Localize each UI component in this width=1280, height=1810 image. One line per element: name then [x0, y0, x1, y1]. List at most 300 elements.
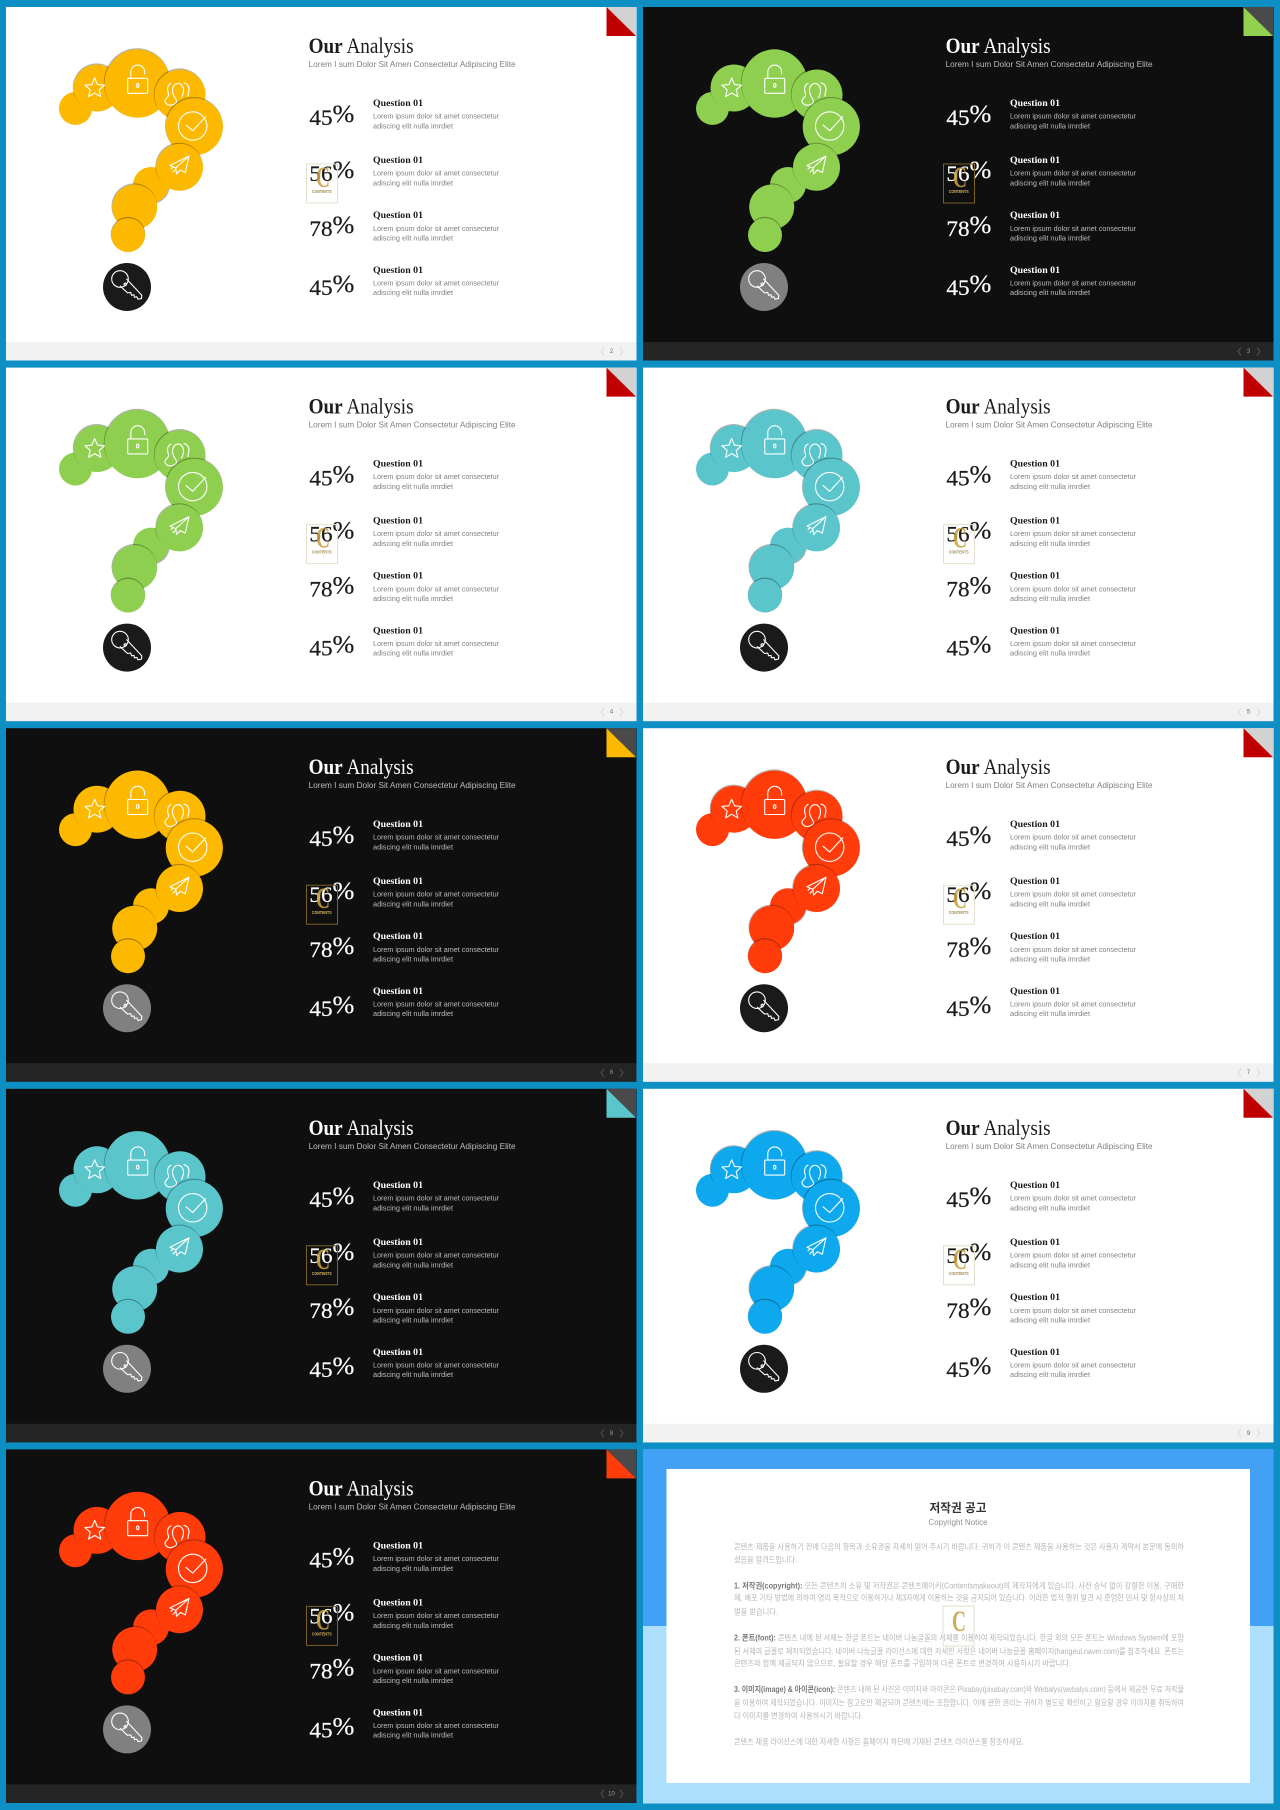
- stat 1: Lorem ipsum dolor sit amet consectetur: [373, 835, 500, 842]
- stat 4: [309, 627, 500, 661]
- copyright body text: [734, 1542, 1185, 1746]
- stat 4: 45: [309, 1717, 331, 1742]
- icons: [722, 65, 844, 174]
- stat 1: [309, 1541, 500, 1573]
- stat 3: Question 01: [1010, 572, 1060, 582]
- stat 1: adiscing elit nulla imrdiet: [373, 124, 453, 130]
- stat 3: 78: [946, 577, 968, 602]
- watermark: C: [953, 522, 967, 555]
- watermark: CONTENTS: [949, 550, 969, 555]
- stat 4: Question 01: [1010, 987, 1060, 997]
- stat 1: Question 01: [1010, 99, 1060, 109]
- stat 1: Question 01: [1010, 820, 1060, 830]
- page number: [601, 1429, 623, 1437]
- stat 3: [946, 932, 1137, 964]
- stat 2: [946, 517, 1137, 548]
- stat 3: Lorem ipsum dolor sit amet consectetur: [373, 1668, 500, 1675]
- stat 3: Question 01: [373, 572, 423, 582]
- page number: 4: [610, 710, 614, 716]
- stat 3: [309, 932, 500, 964]
- stat 1: 45: [309, 1547, 331, 1572]
- stat 3: Question 01: [373, 1293, 423, 1303]
- icons: [85, 65, 207, 174]
- subtitle: Lorem I sum Dolor Sit Amen Consectetur Adipiscing Elite: [309, 1502, 516, 1511]
- page number: 8: [610, 1431, 614, 1437]
- stat 2: 56: [309, 161, 331, 186]
- question mark of circles: [59, 409, 223, 613]
- stat 1: %: [970, 822, 991, 849]
- corner fold: [606, 728, 636, 757]
- stat 1: Lorem ipsum dolor sit amet consectetur: [373, 1195, 500, 1202]
- title: Our Analysis: [309, 394, 414, 419]
- stat 1: 45: [309, 1187, 331, 1212]
- stat 3: 78: [309, 577, 331, 602]
- page number: [1238, 1069, 1260, 1077]
- icons: [722, 426, 844, 535]
- stat 2: 56: [946, 522, 968, 547]
- watermark: [306, 882, 338, 924]
- stat 4: 45: [309, 996, 331, 1021]
- stat 1: adiscing elit nulla imrdiet: [373, 845, 453, 852]
- stat 4: [309, 1348, 500, 1382]
- page number: [1238, 1429, 1260, 1437]
- page number: [1238, 708, 1260, 716]
- stat 3: %: [333, 933, 354, 960]
- key circle: [103, 263, 151, 311]
- stat 2: [309, 877, 500, 909]
- copyright body text: 콘텐츠 제품을 사용하기 전에 다음의 항목과 소유권을 자세히 읽어 주시기 바랍니다. 귀하가 이 콘텐츠 제품을 사용하는 것은 사용자 계약서 본문에 동의하: [734, 1542, 1185, 1552]
- title: Our Analysis: [309, 33, 414, 58]
- stat 3: 78: [309, 1658, 331, 1683]
- stat 3: 78: [309, 1298, 331, 1323]
- stat 2: Lorem ipsum dolor sit amet consectetur: [373, 1252, 500, 1259]
- stat 2: %: [333, 1239, 354, 1266]
- stat 4: [309, 987, 500, 1021]
- stat 3: %: [333, 1294, 354, 1321]
- stat 3: Lorem ipsum dolor sit amet consectetur: [1010, 947, 1137, 954]
- stat 2: %: [970, 518, 991, 545]
- page number: [601, 1069, 623, 1077]
- stat 1: %: [970, 101, 991, 128]
- stat 4: Question 01: [373, 1708, 423, 1718]
- stat 3: adiscing elit nulla imrdiet: [373, 957, 453, 964]
- stat 4: Question 01: [1010, 266, 1060, 276]
- stat 2: adiscing elit nulla imrdiet: [1010, 1262, 1090, 1269]
- watermark: CONTENTS: [949, 1271, 969, 1276]
- stat 2: %: [970, 157, 991, 184]
- slide 7: red-orange question mark, light: [643, 728, 1274, 1082]
- stat 2: Question 01: [373, 1238, 423, 1248]
- stat 2: 56: [309, 522, 331, 547]
- watermark: [306, 1603, 338, 1645]
- stat 2: %: [333, 157, 354, 184]
- question mark of circles: [696, 48, 860, 252]
- stat 4: adiscing elit nulla imrdiet: [373, 651, 453, 658]
- slide 8: teal question mark, dark: [6, 1089, 636, 1442]
- slide 3: green question mark, dark: [643, 7, 1274, 360]
- title: Our Analysis: [946, 394, 1051, 419]
- copyright body text: 된 서체의 글꼴로 제작되었습니다. 네이버 나눔글꼴 라이선스에 대한 자세한 사항은 네이버 나눔글꼴 홈페이지(hangeul.naver.com)를 참조하세요. 폰트는: [734, 1646, 1184, 1656]
- corner fold: [1244, 1089, 1273, 1118]
- stat 4: 45: [309, 275, 331, 300]
- stat 4: [946, 627, 1137, 661]
- stat 4: Question 01: [1010, 1348, 1060, 1358]
- stat 4: Lorem ipsum dolor sit amet consectetur: [373, 280, 500, 288]
- stat 4: 45: [946, 636, 968, 661]
- page number: [601, 1790, 623, 1798]
- stat 1: adiscing elit nulla imrdiet: [1010, 845, 1090, 852]
- stat 3: %: [970, 212, 991, 239]
- subtitle: Lorem I sum Dolor Sit Amen Consectetur Adipiscing Elite: [309, 60, 516, 69]
- stat 2: 56: [309, 1243, 331, 1268]
- key circle: [740, 263, 788, 311]
- stat 3: %: [970, 573, 991, 600]
- copyright body text: 제, 배포 기타 방법에 의하여 영리 목적으로 이용하거나 제3자에게 이용하는 것을 금지되어 있습니다. 이러한 법적 행위 발견 시 준엄한 민사 및 형사상의 처: [734, 1592, 1184, 1602]
- corner fold: [606, 1449, 636, 1478]
- stat 1: %: [970, 462, 991, 489]
- stat 1: [946, 460, 1137, 491]
- stat 4: [946, 1348, 1137, 1382]
- stat 1: %: [333, 1183, 354, 1210]
- watermark: C: [952, 1605, 966, 1638]
- slide 10: red-orange question mark, dark: [6, 1449, 636, 1803]
- stat 2: Question 01: [373, 1598, 423, 1608]
- slide 9: blue question mark, light: [643, 1089, 1274, 1442]
- page number: [601, 708, 623, 716]
- copyright body text: 2. 폰트(font): 콘텐츠 내에 된 서체는 한글 폰트는 네이버 나눔글꼴의 서체를 이용하여 제작되었습니다. 한글 외의 모든 폰트는 Windows System에 포함: [734, 1632, 1185, 1642]
- stat 4: %: [970, 1353, 991, 1380]
- watermark: C: [316, 161, 330, 194]
- page number: [601, 348, 623, 356]
- stat 3: %: [970, 1294, 991, 1321]
- stat 3: Question 01: [1010, 1293, 1060, 1303]
- watermark: C: [953, 161, 967, 194]
- stat 2: %: [333, 878, 354, 905]
- copyright body text: 을 이용하여 제작되었습니다. 이미지는 참고로만 제공되며 콘텐츠에는 포함합니다. 이에 관한 권리는 귀하가 별도로 확인하고 필요할 경우 이미지를 취득하여: [734, 1698, 1184, 1708]
- corner fold: [606, 1089, 636, 1118]
- stat 2: 56: [946, 1243, 968, 1268]
- stat 1: [946, 820, 1137, 852]
- watermark: C: [953, 1243, 967, 1276]
- stat 2: Lorem ipsum dolor sit amet consectetur: [1010, 170, 1137, 178]
- stat 3: [946, 1293, 1137, 1324]
- icons: [722, 1147, 844, 1256]
- stat 4: adiscing elit nulla imrdiet: [1010, 1372, 1090, 1379]
- stat 4: adiscing elit nulla imrdiet: [373, 290, 453, 297]
- stat 4: Question 01: [373, 266, 423, 276]
- watermark: C: [316, 522, 330, 555]
- stat 3: Lorem ipsum dolor sit amet consectetur: [1010, 226, 1137, 233]
- stat 1: Lorem ipsum dolor sit amet consectetur: [373, 114, 500, 120]
- key circle: [740, 984, 788, 1032]
- stat 2: Lorem ipsum dolor sit amet consectetur: [373, 1613, 500, 1620]
- stat 3: Question 01: [1010, 211, 1060, 221]
- stat 1: [309, 820, 500, 852]
- stat 4: Lorem ipsum dolor sit amet consectetur: [373, 1362, 500, 1369]
- stat 1: Lorem ipsum dolor sit amet consectetur: [1010, 114, 1137, 120]
- stat 3: [309, 1653, 500, 1685]
- stat 2: Lorem ipsum dolor sit amet consectetur: [1010, 1252, 1137, 1259]
- watermark: C: [316, 1243, 330, 1276]
- stat 1: 45: [309, 466, 331, 491]
- stat 4: 45: [946, 996, 968, 1021]
- stat 4: Lorem ipsum dolor sit amet consectetur: [373, 1002, 500, 1009]
- stat 3: Question 01: [373, 932, 423, 942]
- watermark: CONTENTS: [949, 189, 969, 194]
- stat 1: adiscing elit nulla imrdiet: [373, 1205, 453, 1212]
- page number: 9: [1247, 1431, 1251, 1437]
- corner fold: [1244, 7, 1273, 36]
- watermark: C: [953, 882, 967, 915]
- stat 3: Lorem ipsum dolor sit amet consectetur: [373, 226, 500, 233]
- stat 3: Question 01: [373, 211, 423, 221]
- stat 3: adiscing elit nulla imrdiet: [1010, 1317, 1090, 1324]
- stat 2: 56: [946, 882, 968, 907]
- stat 3: Lorem ipsum dolor sit amet consectetur: [373, 1308, 500, 1315]
- slide 2: yellow question mark, light: [6, 7, 636, 360]
- stat 3: Question 01: [1010, 932, 1060, 942]
- stat 2: Question 01: [1010, 877, 1060, 887]
- stat 3: %: [333, 212, 354, 239]
- key circle: [103, 1705, 151, 1753]
- slide 6: yellow question mark, dark: [6, 728, 636, 1082]
- corner fold: [606, 368, 636, 397]
- stat 4: %: [333, 632, 354, 659]
- stat 2: [946, 877, 1137, 909]
- stat 2: Question 01: [373, 877, 423, 887]
- stat 2: Lorem ipsum dolor sit amet consectetur: [373, 170, 500, 178]
- key circle: [103, 984, 151, 1032]
- slide 4: green question mark, light: [6, 368, 636, 721]
- stat 1: Lorem ipsum dolor sit amet consectetur: [373, 474, 500, 481]
- stat 3: Question 01: [373, 1653, 423, 1663]
- key circle: [103, 624, 151, 672]
- stat 2: %: [970, 878, 991, 905]
- stat 1: %: [333, 462, 354, 489]
- stat 4: %: [970, 632, 991, 659]
- stat 3: 78: [946, 937, 968, 962]
- stat 3: adiscing elit nulla imrdiet: [1010, 236, 1090, 242]
- stat 4: adiscing elit nulla imrdiet: [373, 1011, 453, 1018]
- stat 2: Question 01: [1010, 1238, 1060, 1248]
- stat 1: Question 01: [1010, 460, 1060, 470]
- stat 4: 45: [309, 1357, 331, 1382]
- page number: 7: [1247, 1070, 1251, 1076]
- stat 1: adiscing elit nulla imrdiet: [373, 484, 453, 491]
- stat 2: adiscing elit nulla imrdiet: [373, 1262, 453, 1269]
- stat 2: 56: [946, 161, 968, 186]
- icons: [85, 1147, 207, 1256]
- stat 3: %: [970, 933, 991, 960]
- subtitle: Lorem I sum Dolor Sit Amen Consectetur Adipiscing Elite: [946, 60, 1153, 69]
- stat 3: 78: [946, 216, 968, 241]
- stat 1: Question 01: [373, 820, 423, 830]
- question mark of circles: [696, 409, 860, 613]
- stat 2: Question 01: [1010, 156, 1060, 166]
- copyright body text: 1. 저작권(copyright): 모든 콘텐츠의 소유 및 저작권은 콘텐츠메이커(Contentsmakeout)의 제작자에게 있습니다. 사전 승낙 없이 강렬한 이용, 구매한: [734, 1580, 1185, 1590]
- copyright body text: 콘텐츠와 함께 제공되지 않으므로, 필요할 경우 해당 폰트를 구입하여 다른 폰트로 변경하여 사용하시기 바랍니다.: [734, 1658, 1071, 1668]
- watermark: [944, 882, 974, 924]
- copyright body text: 콘텐츠 제품 라이선스에 대한 자세한 사항은 홈페이지 하단에 기재된 콘텐츠 라이선스를 참조하세요.: [734, 1736, 1024, 1746]
- stat 4: Lorem ipsum dolor sit amet consectetur: [1010, 641, 1137, 648]
- slide 5: teal question mark, light: [643, 368, 1274, 721]
- stat 3: [309, 1293, 500, 1324]
- stat 4: Question 01: [373, 627, 423, 637]
- stat 2: Question 01: [1010, 517, 1060, 527]
- subtitle: Lorem I sum Dolor Sit Amen Consectetur Adipiscing Elite: [946, 1142, 1153, 1151]
- page number: 6: [610, 1070, 614, 1076]
- stat 1: %: [333, 101, 354, 128]
- page number: [1238, 348, 1260, 356]
- stat 3: [309, 211, 500, 242]
- title: Our Analysis: [309, 754, 414, 779]
- icons: [722, 786, 844, 895]
- stat 4: Lorem ipsum dolor sit amet consectetur: [373, 641, 500, 648]
- key circle: [103, 1345, 151, 1393]
- stat 4: Lorem ipsum dolor sit amet consectetur: [1010, 1002, 1137, 1009]
- stat 3: %: [333, 1654, 354, 1681]
- stat 3: 78: [946, 1298, 968, 1323]
- stat 2: adiscing elit nulla imrdiet: [373, 902, 453, 909]
- page number: 10: [608, 1791, 615, 1797]
- watermark: [944, 522, 974, 564]
- stat 4: adiscing elit nulla imrdiet: [373, 1372, 453, 1379]
- stat 4: [946, 266, 1137, 300]
- stat 1: [309, 460, 500, 491]
- stat 2: [309, 1238, 500, 1269]
- stat 4: Lorem ipsum dolor sit amet consectetur: [1010, 280, 1137, 288]
- copyright body text: 다 이미지를 변경하여 사용하시기 바랍니다.: [734, 1710, 863, 1720]
- stat 1: Question 01: [373, 1181, 423, 1191]
- stat 4: adiscing elit nulla imrdiet: [1010, 290, 1090, 297]
- stat 3: %: [333, 573, 354, 600]
- subtitle: Lorem I sum Dolor Sit Amen Consectetur Adipiscing Elite: [946, 421, 1153, 430]
- copyright notice panel: [643, 1449, 1274, 1804]
- stat 1: Question 01: [373, 99, 423, 109]
- stat 1: Question 01: [1010, 1181, 1060, 1191]
- stat 2: Lorem ipsum dolor sit amet consectetur: [1010, 892, 1137, 899]
- stat 4: %: [970, 992, 991, 1019]
- stat 1: adiscing elit nulla imrdiet: [1010, 484, 1090, 491]
- watermark: CONTENTS: [312, 1271, 332, 1276]
- stat 4: adiscing elit nulla imrdiet: [1010, 1011, 1090, 1018]
- page number: 2: [610, 349, 614, 355]
- subtitle: Lorem I sum Dolor Sit Amen Consectetur Adipiscing Elite: [309, 781, 516, 790]
- stat 2: %: [970, 1239, 991, 1266]
- watermark: C: [316, 882, 330, 915]
- watermark: [306, 522, 338, 564]
- watermark: CONTENTS: [312, 910, 332, 915]
- corner fold: [1244, 368, 1273, 397]
- question mark of circles: [59, 1491, 223, 1694]
- stat 3: adiscing elit nulla imrdiet: [373, 236, 453, 242]
- stat 2: Question 01: [373, 156, 423, 166]
- watermark: CONTENTS: [312, 189, 332, 194]
- stat 2: [946, 1238, 1137, 1269]
- stat 4: Question 01: [1010, 627, 1060, 637]
- stat 1: 45: [946, 826, 968, 851]
- stat 1: Lorem ipsum dolor sit amet consectetur: [1010, 835, 1137, 842]
- stat 4: %: [333, 271, 354, 298]
- stat 4: [309, 1708, 500, 1742]
- watermark: [944, 1243, 974, 1285]
- stat 4: [309, 266, 500, 300]
- stat 3: 78: [309, 937, 331, 962]
- stat 4: Lorem ipsum dolor sit amet consectetur: [373, 1723, 500, 1730]
- watermark: [306, 161, 338, 203]
- question mark of circles: [696, 1130, 860, 1334]
- title: Our Analysis: [946, 1115, 1051, 1140]
- copyright body text: 3. 이미지(image) & 아이콘(icon): 콘텐츠 내에 된 사진은 이미지와 아이콘은 Pixabay(pixabay.com)와 Webalys(webalys.com) 등에서 제공한 무료 저작물: [734, 1684, 1184, 1694]
- stat 1: %: [333, 1543, 354, 1570]
- watermark: C: [316, 1603, 330, 1636]
- stat 1: Lorem ipsum dolor sit amet consectetur: [1010, 474, 1137, 481]
- stat 3: adiscing elit nulla imrdiet: [1010, 957, 1090, 964]
- copyright body text: 벌을 받습니다.: [734, 1606, 778, 1616]
- stat 3: adiscing elit nulla imrdiet: [373, 596, 453, 603]
- key circle: [740, 1345, 788, 1393]
- stat 2: [946, 156, 1137, 188]
- corner fold: [606, 7, 636, 36]
- stat 1: [946, 1181, 1137, 1212]
- stat 4: 45: [946, 1357, 968, 1382]
- stat 1: Lorem ipsum dolor sit amet consectetur: [1010, 1195, 1137, 1202]
- stat 1: [309, 1181, 500, 1212]
- stat 1: %: [970, 1183, 991, 1210]
- stat 4: Question 01: [373, 1348, 423, 1358]
- stat 1: Lorem ipsum dolor sit amet consectetur: [373, 1556, 500, 1563]
- stat 2: adiscing elit nulla imrdiet: [373, 1623, 453, 1630]
- title: Our Analysis: [309, 1115, 414, 1140]
- stat 3: [946, 211, 1137, 242]
- stat 3: Lorem ipsum dolor sit amet consectetur: [373, 947, 500, 954]
- question mark of circles: [59, 769, 223, 973]
- copyright subheading: Copyright Notice: [928, 1518, 988, 1527]
- stat 2: 56: [309, 882, 331, 907]
- stat 1: Question 01: [373, 1541, 423, 1551]
- stat 1: %: [333, 822, 354, 849]
- subtitle: Lorem I sum Dolor Sit Amen Consectetur Adipiscing Elite: [309, 421, 516, 430]
- stat 2: adiscing elit nulla imrdiet: [373, 541, 453, 548]
- icons: [85, 1508, 207, 1616]
- stat 3: adiscing elit nulla imrdiet: [1010, 596, 1090, 603]
- stat 1: 45: [309, 105, 331, 130]
- stat 2: adiscing elit nulla imrdiet: [1010, 902, 1090, 909]
- stat 4: [946, 987, 1137, 1021]
- watermark: [943, 1605, 974, 1646]
- stat 4: %: [333, 1713, 354, 1740]
- question mark of circles: [59, 48, 223, 252]
- watermark: [306, 1243, 338, 1285]
- stat 1: adiscing elit nulla imrdiet: [1010, 124, 1090, 130]
- stat 4: 45: [946, 275, 968, 300]
- stat 2: Lorem ipsum dolor sit amet consectetur: [373, 892, 500, 899]
- subtitle: Lorem I sum Dolor Sit Amen Consectetur Adipiscing Elite: [309, 1142, 516, 1151]
- title: Our Analysis: [309, 1475, 414, 1500]
- page number: 3: [1247, 349, 1251, 355]
- stat 1: [946, 99, 1137, 130]
- stat 2: %: [333, 1599, 354, 1626]
- key circle: [740, 624, 788, 672]
- stat 1: 45: [309, 826, 331, 851]
- title: Our Analysis: [946, 754, 1051, 779]
- stat 3: Lorem ipsum dolor sit amet consectetur: [373, 587, 500, 594]
- stat 2: [309, 1598, 500, 1630]
- stat 1: adiscing elit nulla imrdiet: [373, 1566, 453, 1573]
- watermark: [944, 161, 974, 203]
- corner fold: [1244, 728, 1273, 757]
- stat 2: adiscing elit nulla imrdiet: [1010, 541, 1090, 548]
